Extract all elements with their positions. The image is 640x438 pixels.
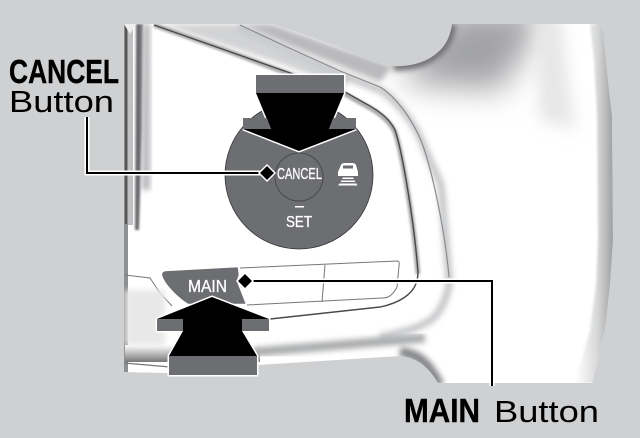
main diamond: [237, 273, 253, 289]
leader line: main: [237, 273, 492, 386]
cancel button: [275, 153, 323, 201]
main label on button: MAIN: [188, 276, 227, 296]
main button: [162, 267, 246, 304]
set label: SET: [286, 214, 312, 231]
label: main button: MAIN: [404, 392, 480, 429]
arrow: press main: [157, 297, 269, 375]
label: main button: [404, 392, 599, 429]
minus sign: [295, 206, 304, 208]
icon: car following distance: [338, 163, 358, 186]
label: cancel button: Button: [9, 84, 114, 119]
label: cancel button: CANCEL: [9, 53, 119, 90]
label: main button: Button: [494, 394, 599, 429]
arrow: press cancel: [243, 75, 356, 151]
button pad outline: [240, 261, 399, 305]
round control disc: [225, 101, 373, 249]
cancel label on disc: CANCEL: [277, 166, 322, 183]
cancel diamond: [259, 165, 275, 181]
label: cancel button: [9, 53, 119, 119]
steering wheel spoke: [124, 10, 615, 385]
leader line: cancel: [87, 117, 275, 181]
